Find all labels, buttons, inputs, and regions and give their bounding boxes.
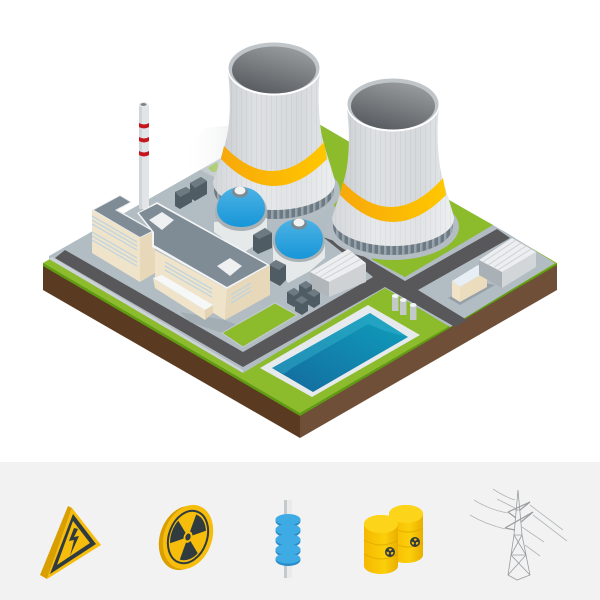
shadow behind cooling tower — [180, 125, 235, 185]
wires — [470, 489, 567, 556]
storage tanks — [392, 294, 417, 320]
icon: radiation disc — [150, 497, 223, 577]
curb lines — [49, 257, 243, 373]
pool far wall — [272, 313, 408, 374]
pool lawn — [257, 292, 448, 412]
hall window stripes — [165, 262, 251, 303]
icon: blue insulator — [276, 500, 300, 578]
icon: power pylon — [470, 489, 567, 580]
road network — [55, 229, 510, 367]
soil left side — [43, 263, 300, 438]
isometric plant platform — [43, 113, 557, 438]
left wing walls — [92, 210, 140, 282]
soil right side — [300, 263, 557, 438]
left wing roof — [92, 195, 155, 238]
water pool — [260, 305, 420, 397]
icon: high voltage warning sign — [40, 506, 101, 579]
main hall walls — [155, 250, 227, 320]
grass edge — [43, 263, 557, 416]
reactor dome 1 — [214, 186, 267, 253]
pool water — [272, 313, 408, 392]
paved yard — [49, 113, 555, 373]
pylon body — [508, 490, 530, 580]
cross arms — [505, 502, 533, 530]
icon: radioactive barrels — [364, 505, 423, 574]
yard lawn — [222, 303, 297, 347]
hall roof — [137, 202, 270, 289]
upper grass lawn — [320, 127, 493, 277]
main building — [92, 195, 270, 320]
grass patch behind tower — [208, 162, 220, 172]
pool rim — [260, 305, 420, 397]
building ground shadow — [180, 312, 240, 334]
reactor dome 2 — [273, 218, 325, 283]
equipment box beside dome — [253, 228, 272, 254]
left wing window stripes — [92, 216, 137, 266]
cream storage building — [448, 265, 495, 305]
ribbed utility building — [310, 249, 366, 297]
back barrel — [389, 505, 423, 563]
grass top — [43, 113, 557, 413]
annex — [153, 278, 205, 320]
ribbed warehouse — [479, 238, 536, 288]
equipment box near building — [269, 260, 286, 286]
front barrel — [364, 515, 398, 574]
roof vent 1 — [149, 212, 174, 230]
chimney — [138, 102, 149, 209]
cluster of equipment boxes — [287, 281, 320, 315]
cooling tower right — [327, 78, 459, 260]
roof vent 2 — [217, 258, 242, 276]
dark equipment boxes behind dome — [175, 177, 207, 209]
bottom icon strip background — [0, 462, 600, 600]
cooling tower left — [208, 42, 340, 224]
